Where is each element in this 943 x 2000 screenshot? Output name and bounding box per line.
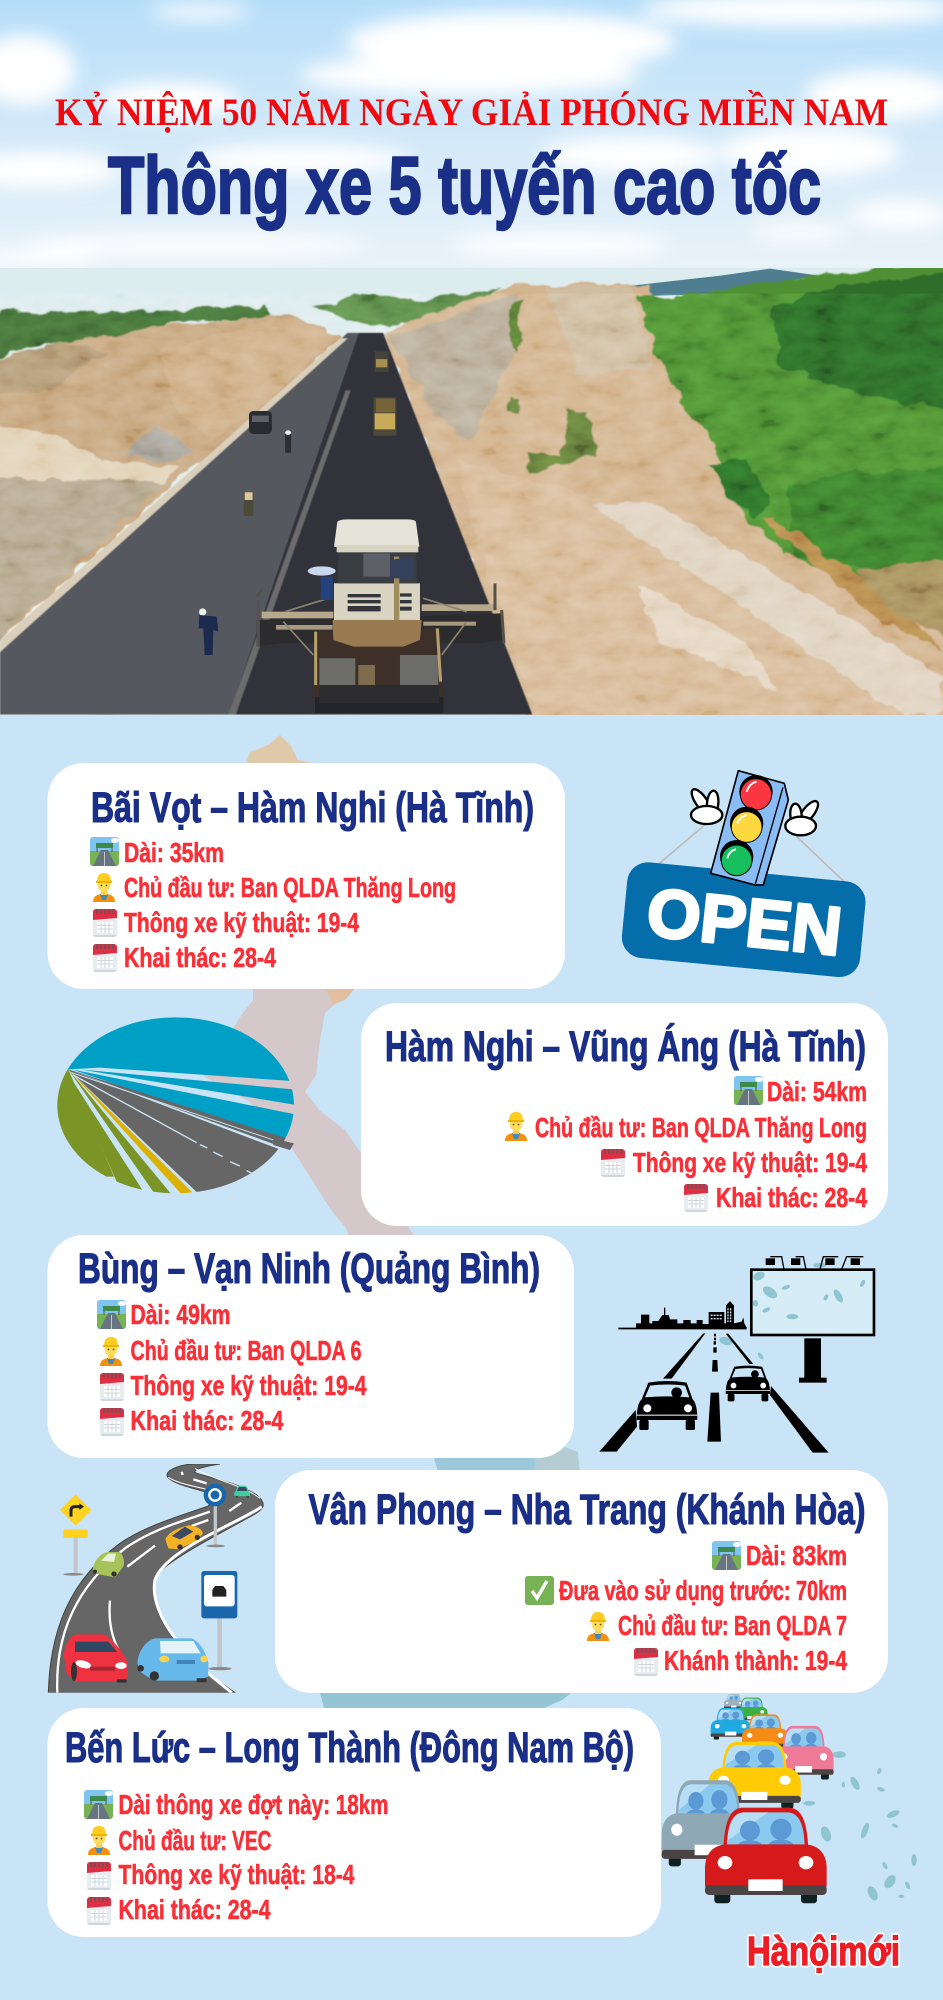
- icon: worker: [88, 1826, 110, 1855]
- icon: calendar: [93, 944, 117, 972]
- small teal car: [234, 1486, 250, 1497]
- panel: Bùng – Vạn Ninh: [48, 1235, 574, 1458]
- paver machine: [199, 500, 505, 713]
- icon: worker: [505, 1112, 527, 1141]
- photo: highway under construction: [0, 262, 943, 735]
- operation: Khai thác: 28-4: [124, 942, 276, 973]
- icon: road: [84, 1790, 113, 1819]
- icon: worker: [93, 873, 115, 902]
- length: Dài: 35km: [124, 837, 224, 868]
- icon: road: [97, 1300, 126, 1329]
- islands: [803, 1751, 917, 1902]
- road lines: [599, 1333, 829, 1453]
- icon: calendar: [93, 909, 117, 937]
- icon: calendar: [634, 1648, 658, 1676]
- length: Dài: 83km: [746, 1540, 847, 1571]
- operation: Khai thác: 28-4: [118, 1894, 271, 1925]
- heading: Bến Lức – Long Thành (Đông Nam Bộ): [65, 1724, 634, 1772]
- logo: Hànộimới: Hànộimới: [747, 1928, 900, 1974]
- sign: roundabout: [204, 1484, 226, 1547]
- icon: calendar: [87, 1897, 111, 1925]
- blue car: [137, 1638, 208, 1682]
- billboard: [719, 1257, 874, 1383]
- investor: Chủ đầu tư: VEC: [118, 1825, 272, 1856]
- car green: [736, 1698, 768, 1722]
- road: [0, 333, 358, 715]
- illustration: open sign with traffic light: [620, 771, 867, 979]
- illustration: winding road with signs and cars: [48, 1464, 263, 1693]
- heading: Bãi Vọt – Hàm Nghi (Hà Tĩnh): [91, 784, 534, 832]
- length: Dài thông xe đợt này: 18km: [118, 1789, 388, 1820]
- illustration: road in circle: [57, 1017, 294, 1194]
- icon: calendar: [601, 1149, 625, 1177]
- icon: calendar: [100, 1373, 124, 1401]
- icon: calendar: [87, 1862, 111, 1890]
- length: Dài: 49km: [130, 1299, 230, 1330]
- investor: Chủ đầu tư: Ban QLDA Thăng Long: [124, 872, 456, 903]
- investor: Chủ đầu tư: Ban QLDA 6: [130, 1335, 362, 1366]
- car back gray: [724, 1694, 743, 1709]
- icon: calendar: [684, 1184, 708, 1212]
- red car: [64, 1634, 127, 1683]
- yellow car: [165, 1525, 203, 1550]
- icon: worker: [100, 1337, 122, 1366]
- background: sky header: [0, 0, 943, 268]
- icon: worker: [587, 1612, 609, 1641]
- operation: Khai thác: 28-4: [130, 1405, 284, 1436]
- illustration: black road, cars and billboard: [599, 1257, 874, 1453]
- icon: check: [525, 1576, 554, 1605]
- car small: [726, 1366, 770, 1401]
- illustration: traffic queue of cars and islands: [662, 1694, 917, 1903]
- panel: Bến Lức – Long Thành: [48, 1708, 661, 1937]
- panel: Bãi Vọt – Hàm Nghi: [48, 763, 565, 989]
- heading: Bùng – Vạn Ninh (Quảng Bình): [78, 1245, 540, 1293]
- icon: road: [90, 837, 119, 866]
- car orange: [742, 1714, 788, 1751]
- icon: road: [712, 1541, 741, 1570]
- car red: [705, 1808, 827, 1903]
- technical opening: Thông xe kỹ thuật: 19-4: [130, 1370, 367, 1401]
- bushes on hill: [511, 298, 523, 354]
- car pink: [774, 1726, 834, 1779]
- forest: [635, 268, 943, 578]
- illustration: open sign with traffic light: OPEN: [643, 874, 845, 970]
- technical opening: Thông xe kỹ thuật: 19-4: [633, 1147, 867, 1178]
- glove left: [688, 786, 722, 824]
- glove right: [785, 798, 821, 835]
- panel: Vân Phong – Nha Trang: [275, 1470, 888, 1693]
- icon: road: [734, 1076, 763, 1105]
- car large: [637, 1381, 697, 1430]
- background map of Vietnam: [203, 735, 580, 1712]
- terrain texture: [0, 294, 943, 715]
- car blue: [711, 1708, 751, 1740]
- sign: blue car: [201, 1571, 237, 1670]
- panel: Hàm Nghi – Vũng Áng: [361, 1003, 888, 1226]
- vehicles on road: [244, 351, 396, 515]
- far mountains: [619, 269, 818, 296]
- length: Dài: 54km: [767, 1076, 867, 1107]
- car gray: [662, 1780, 754, 1866]
- car yellow: [708, 1742, 801, 1809]
- icon: calendar: [100, 1408, 124, 1436]
- operation: Khai thác: 28-4: [716, 1182, 867, 1213]
- technical opening: Thông xe kỹ thuật: 19-4: [124, 907, 359, 938]
- right hill: [385, 285, 943, 735]
- inauguration: Khánh thành: 19-4: [664, 1645, 847, 1676]
- technical opening: Thông xe kỹ thuật: 18-4: [118, 1859, 355, 1890]
- sign: turn right diamond: [60, 1494, 91, 1576]
- logo: Hànộimới: Hànộimới: [747, 1928, 900, 1974]
- investor: Chủ đầu tư: Ban QLDA 7: [618, 1610, 847, 1641]
- green car: [93, 1552, 124, 1577]
- traffic light: [711, 771, 788, 885]
- city skyline: [618, 1301, 747, 1329]
- left hill: [0, 315, 340, 657]
